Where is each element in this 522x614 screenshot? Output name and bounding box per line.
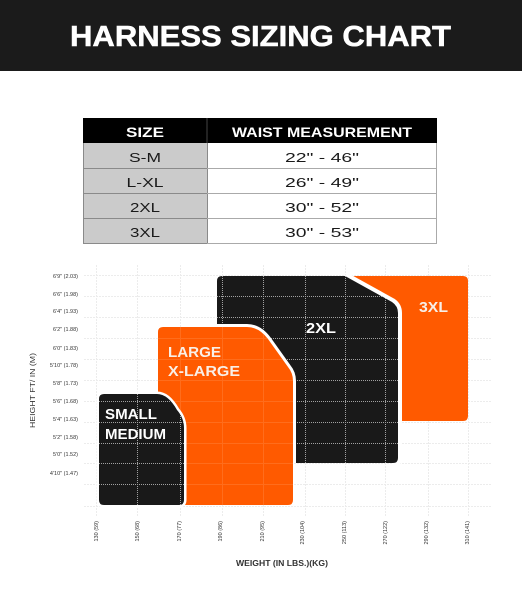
zone: Small / Medium — [99, 394, 186, 505]
zone: Large / X-Large: LARGE — [168, 344, 221, 361]
weight axis title: WEIGHT (IN LBS.)(KG) — [236, 559, 328, 568]
table row: 2XL — [130, 200, 360, 215]
table row: L-XL: 26" - 49" — [285, 175, 360, 190]
table row: 3XL — [130, 225, 360, 240]
height axis labels: 6'0" (1.83) — [53, 346, 78, 352]
table row: S-M — [129, 150, 360, 165]
table header row: WAIST MEASUREMENT — [232, 124, 413, 140]
weight axis labels: 150 (68) — [135, 521, 141, 542]
weight axis labels: 250 (113) — [342, 521, 348, 544]
zone: 3XL — [340, 276, 468, 421]
title: HARNESS SIZING CHART — [70, 21, 451, 53]
table row: 3XL: 3XL — [130, 225, 160, 240]
weight axis labels: 130 (59) — [94, 521, 100, 542]
table row: 2XL: 2XL — [130, 200, 160, 215]
title banner — [0, 0, 522, 71]
weight axis labels: 210 (95) — [260, 521, 266, 542]
height axis labels: 5'4" (1.63) — [53, 417, 78, 423]
height axis labels: 6'9" (2.03) — [53, 274, 78, 280]
height axis labels: 5'8" (1.73) — [53, 381, 78, 387]
table row: 3XL: 30" - 53" — [285, 225, 360, 240]
zone: 3XL: 3XL — [419, 299, 448, 316]
zone: Large / X-Large: X-LARGE — [168, 363, 240, 380]
sizing chart — [28, 265, 492, 568]
height axis labels: 6'6" (1.98) — [53, 292, 78, 298]
height axis labels: 4'10" (1.47) — [50, 471, 78, 477]
zone: 2XL — [217, 276, 400, 463]
zone: Large / X-Large — [158, 327, 293, 505]
table row: L-XL: L-XL — [126, 175, 164, 190]
zone: 2XL: 2XL — [306, 320, 336, 337]
size column shading — [83, 143, 207, 243]
table header row — [83, 118, 437, 143]
weight axis labels: 230 (104) — [300, 521, 306, 545]
height axis labels — [50, 274, 78, 477]
table row: S-M: S-M — [129, 150, 161, 165]
weight axis labels: 270 (122) — [383, 521, 389, 545]
weight axis labels: 310 (141) — [465, 521, 471, 545]
size table — [83, 118, 437, 244]
height axis labels: 5'0" (1.52) — [53, 452, 78, 458]
table row: 2XL: 30" - 52" — [285, 200, 360, 215]
height axis labels: 6'2" (1.88) — [53, 327, 78, 333]
weight axis labels: 290 (132) — [424, 521, 430, 545]
height axis labels: 5'6" (1.68) — [53, 399, 78, 405]
table row: L-XL — [126, 175, 360, 190]
table row: S-M: 22" - 46" — [285, 150, 360, 165]
table header row: SIZE — [126, 124, 164, 140]
zone: Small / Medium: MEDIUM — [105, 426, 166, 443]
height axis labels: 5'2" (1.58) — [53, 435, 78, 441]
height axis labels: 5'10" (1.78) — [50, 363, 78, 369]
height axis title: HEIGHT FT/ IN (M) — [28, 352, 37, 428]
weight axis labels — [94, 521, 471, 545]
zone: Small / Medium: SMALL — [105, 406, 157, 423]
weight axis labels: 170 (77) — [177, 521, 183, 542]
weight axis labels: 190 (86) — [218, 521, 224, 542]
height axis labels: 6'4" (1.93) — [53, 309, 78, 315]
